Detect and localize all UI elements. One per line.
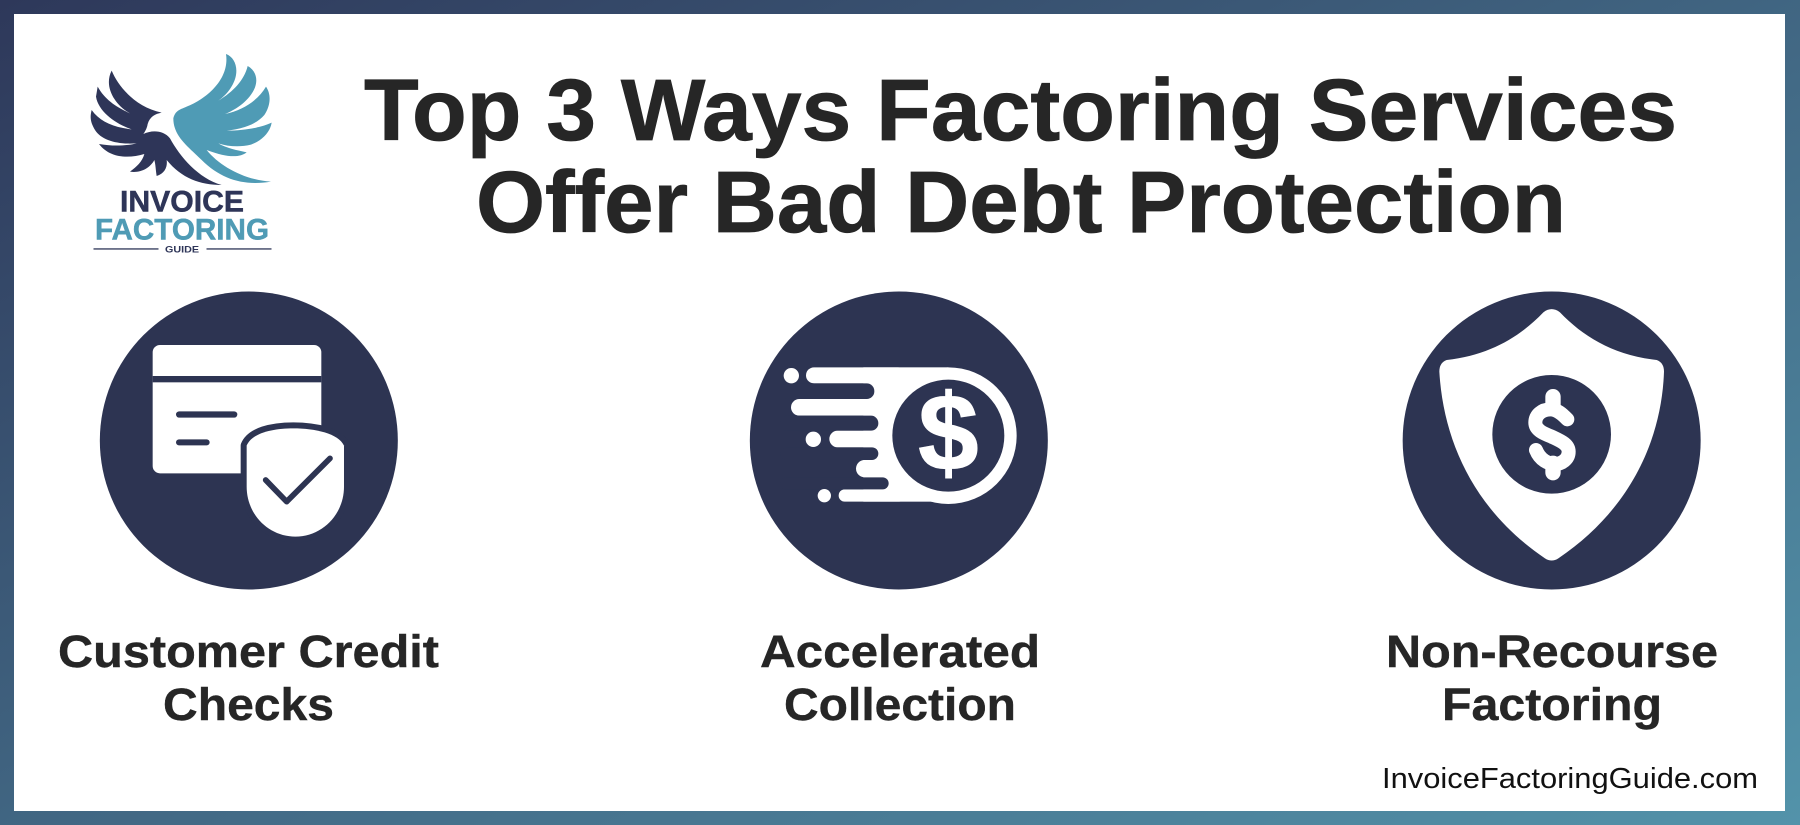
panel: non-recourse factoring (1386, 291, 1718, 730)
footer website: InvoiceFactoringGuide.com (1382, 763, 1758, 795)
label: Customer Credit Checks (58, 626, 439, 730)
label: Customer Credit Checks: Checks (163, 679, 334, 730)
text: FACTORING: FACTORING (95, 214, 269, 246)
label: Non-Recourse Factoring: Non-Recourse (1386, 626, 1718, 677)
icon: speeding dollar coin (750, 291, 1048, 589)
label: Accelerated Collection (760, 626, 1040, 730)
icon: speeding dollar coin: $ (918, 373, 979, 494)
label: Accelerated Collection: Accelerated (760, 626, 1040, 677)
panel: customer credit checks (58, 291, 439, 730)
panel: accelerated collection (750, 291, 1048, 730)
title: Offer Bad Debt Protection (476, 153, 1566, 251)
icon: credit card with shield (100, 291, 398, 589)
icon: shield with dollar (1403, 291, 1701, 589)
title: Top 3 Ways Factoring Services (364, 61, 1677, 159)
label: Non-Recourse Factoring: Factoring (1442, 679, 1662, 730)
text: INVOICE: INVOICE (120, 186, 244, 218)
label: Accelerated Collection: Collection (784, 679, 1016, 730)
label: Customer Credit Checks: Customer Credit (58, 626, 439, 677)
title (364, 61, 1677, 251)
logo: Invoice Factoring Guide (91, 54, 272, 255)
text: GUIDE: GUIDE (165, 244, 199, 256)
label: Non-Recourse Factoring (1386, 626, 1718, 730)
icon: eagle right wing (173, 54, 272, 183)
icon: eagle left wing and head (91, 71, 222, 185)
